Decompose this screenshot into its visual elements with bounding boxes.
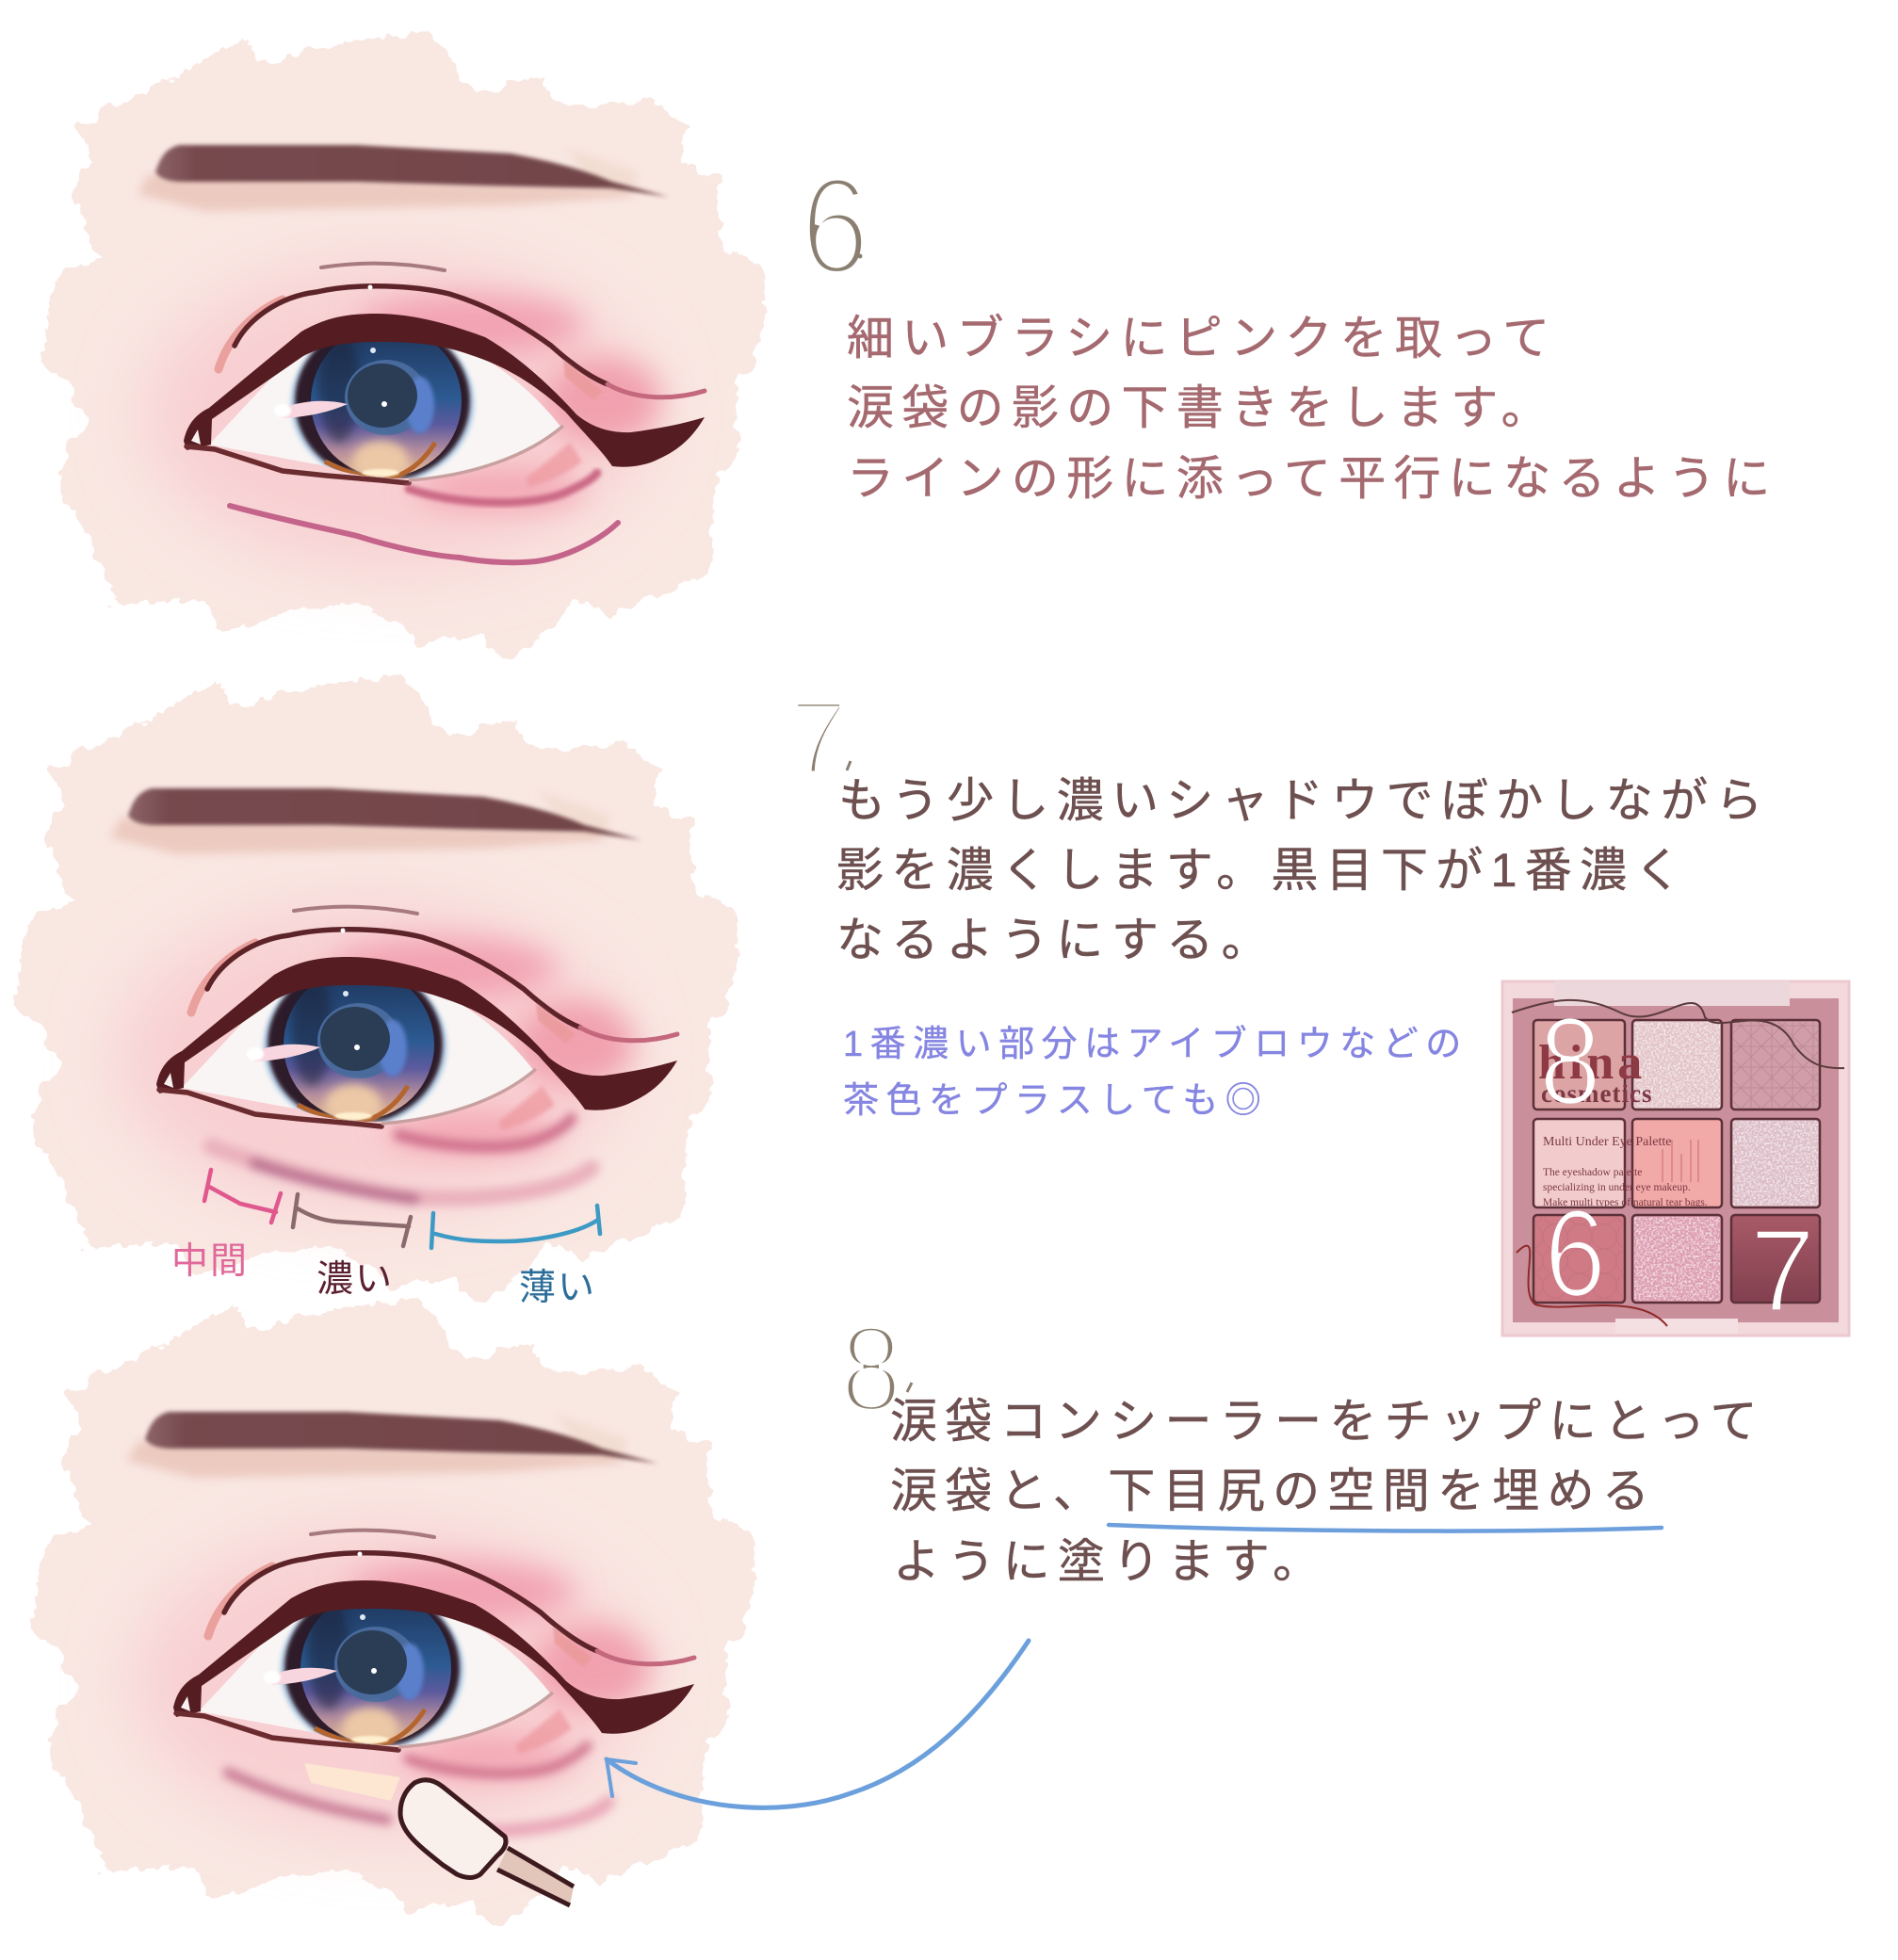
panel: step 7 eye illustration bbox=[13, 673, 738, 1308]
palette printed text: cosmetics bbox=[1541, 1079, 1652, 1108]
text block: step 8: 涙袋と、下目尻の空間を埋める bbox=[890, 1465, 1657, 1517]
palette handwritten numerals bbox=[1539, 993, 1815, 1336]
text block: step 8: 涙袋コンシーラーをチップにとって bbox=[890, 1395, 1765, 1448]
step number 8: 8 bbox=[840, 1301, 901, 1437]
under-eye sketch line bbox=[230, 506, 618, 562]
text block: step 8: ように塗ります。 bbox=[893, 1535, 1327, 1588]
arrow: to concealer area bbox=[607, 1641, 1029, 1807]
palette printed text bbox=[1538, 1036, 1708, 1208]
panel: step 8 eye illustration bbox=[30, 1297, 755, 1928]
text block: step 7: なるようにする。 bbox=[836, 914, 1276, 966]
step number 6: 6 bbox=[801, 150, 869, 303]
palette printed text: specializing in under eye makeup. bbox=[1543, 1182, 1691, 1193]
palette photo bbox=[1502, 981, 1849, 1336]
step number 7: 7 bbox=[789, 679, 848, 797]
text block: step 7 bbox=[836, 774, 1771, 966]
bracket: dark bbox=[293, 1194, 411, 1246]
shadow pans bbox=[1533, 1020, 1820, 1303]
note: blue tip bbox=[843, 1025, 1468, 1121]
icon: applicator tip bbox=[400, 1780, 574, 1905]
bracket: light bbox=[431, 1206, 600, 1248]
palette handwritten numerals: 8 bbox=[1539, 993, 1601, 1131]
palette handwritten numerals: 6 bbox=[1545, 1185, 1606, 1323]
text block: step 6: 涙袋の影の下書きをします。 bbox=[847, 381, 1556, 434]
text block: step 6: 細いブラシにピンクを取って bbox=[847, 312, 1557, 364]
text block: step 6: ラインの形に添って平行になるように bbox=[847, 452, 1778, 505]
text block: step 7: 影を濃くします。黒目下が1番濃く bbox=[836, 844, 1690, 897]
blended under-eye shadow bbox=[211, 1118, 592, 1199]
label: 濃い: 濃い bbox=[316, 1259, 394, 1300]
text block: step 6 bbox=[847, 312, 1778, 505]
palette printed text: The eyeshadow palette bbox=[1543, 1167, 1642, 1178]
wiggly lines bbox=[1512, 1000, 1844, 1326]
text block: step 8 bbox=[890, 1395, 1765, 1588]
note: blue tip: 1番濃い部分はアイブロウなどの bbox=[843, 1025, 1468, 1064]
concealer patch bbox=[304, 1763, 400, 1801]
under-eye shadow bbox=[228, 1745, 608, 1832]
text block: step 7: もう少し濃いシャドウでぼかしながら bbox=[838, 774, 1771, 827]
bracket: medium bbox=[204, 1170, 281, 1223]
pan emboss patterns bbox=[1535, 1022, 1818, 1301]
palette handwritten numerals: 7 bbox=[1750, 1207, 1815, 1336]
note: blue tip: 茶色をプラスしても◎ bbox=[843, 1081, 1268, 1121]
under-eye shadow guide line upper bbox=[409, 473, 597, 503]
label: 中間: 中間 bbox=[171, 1241, 249, 1282]
panel: step 6 eye illustration bbox=[41, 30, 766, 661]
underline: highlight bbox=[1109, 1525, 1662, 1531]
glitter texture bbox=[1634, 1022, 1818, 1301]
palette printed text: Multi Under Eye Palette bbox=[1543, 1135, 1671, 1149]
palette printed text: Make multi types of natural tear bags. bbox=[1543, 1197, 1708, 1208]
palette printed text: hina bbox=[1538, 1036, 1646, 1090]
label: 薄い: 薄い bbox=[519, 1268, 596, 1308]
